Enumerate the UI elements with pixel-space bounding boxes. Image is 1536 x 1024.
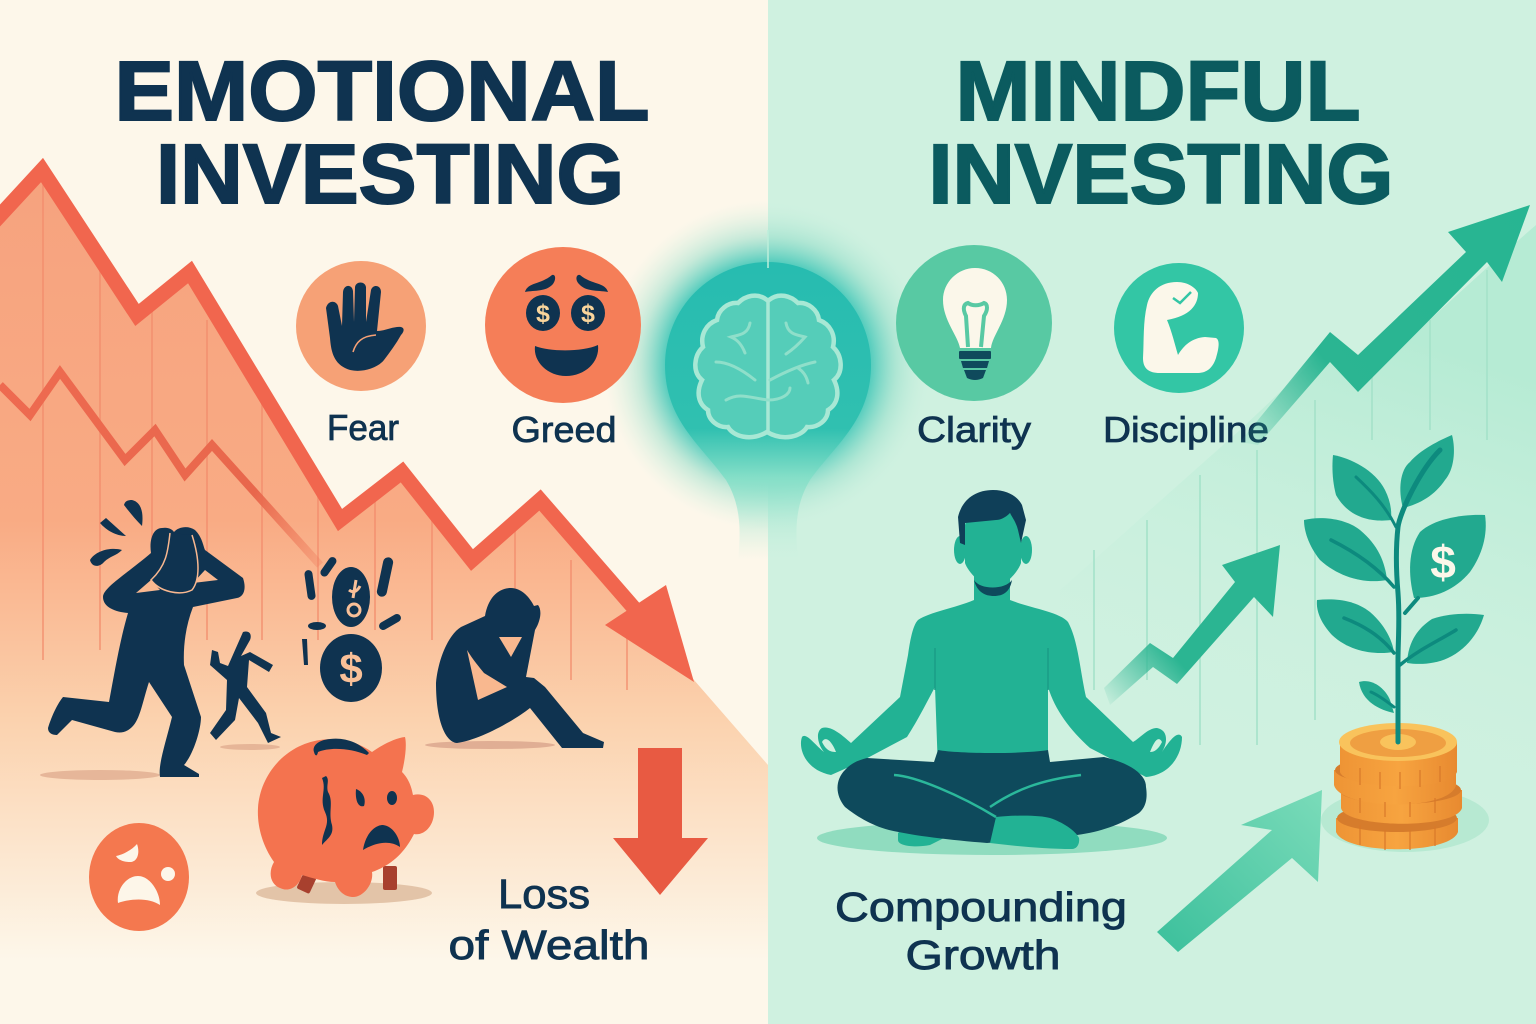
head: [954, 536, 966, 564]
title: emotional investing: EMOTIONAL: [114, 44, 650, 138]
main falling arrow: [0, 170, 694, 682]
icon: discipline flexed arm: [1114, 263, 1244, 393]
left panel: falling chart area: [0, 170, 768, 1024]
arms and torso: [801, 570, 1182, 777]
icon: fear hand: [296, 261, 426, 391]
icon: falling coins: [302, 556, 402, 702]
coin stack: [1334, 723, 1462, 850]
figure: meditating person: [801, 490, 1182, 855]
icon: greed face: [485, 247, 641, 403]
label: clarity: Clarity: [917, 409, 1031, 450]
stem and veins: [1331, 450, 1456, 742]
background: left panel: [0, 0, 768, 1024]
loss down arrow: [613, 748, 708, 895]
secondary falling line: [0, 372, 320, 565]
leg lines: [894, 775, 1081, 817]
big rising arrow: [1240, 205, 1530, 445]
icon: greed face: $: [581, 300, 595, 328]
icon: cracked piggy bank: [256, 737, 434, 904]
label: loss of wealth: of Wealth: [448, 922, 650, 968]
icon: sad face: [89, 823, 189, 931]
background: right panel: [768, 0, 1536, 1024]
label: discipline: Discipline: [1103, 409, 1269, 450]
low rising arrow: [1157, 790, 1322, 952]
icon: greed face: $: [536, 300, 550, 328]
icon: clarity light bulb: [896, 245, 1052, 401]
figure: small runner: [210, 632, 281, 750]
title: mindful investing: INVESTING: [928, 127, 1394, 221]
label: compounding growth: Growth: [906, 932, 1060, 978]
label: fear: Fear: [327, 407, 399, 448]
icon: money plant on coins: $: [1430, 536, 1456, 588]
label: compounding growth: Compounding: [835, 884, 1127, 930]
figure: panicked runner: [40, 500, 245, 780]
title: emotional investing: [114, 44, 650, 221]
legs: [838, 750, 1147, 843]
mid rising arrow: [1104, 545, 1280, 705]
title: mindful investing: MINDFUL: [956, 44, 1360, 138]
leaves: [1304, 435, 1486, 713]
arm creases: [935, 648, 1048, 690]
label: compounding growth: [835, 884, 1127, 978]
title: mindful investing: [928, 44, 1394, 221]
figure: despairing person: [425, 588, 604, 749]
label: greed: Greed: [512, 409, 616, 450]
hair: [958, 490, 1026, 545]
chin shadow: [974, 580, 1012, 596]
label: loss of wealth: [448, 871, 650, 968]
front foot: [990, 816, 1079, 849]
label: loss of wealth: Loss: [498, 871, 590, 917]
icon: brain with glow: [603, 200, 933, 560]
icon: money plant on coins: [1304, 435, 1489, 852]
right panel chart area: [1060, 225, 1536, 800]
hand holes: [822, 739, 836, 752]
title: emotional investing: INVESTING: [156, 127, 624, 221]
icon: falling coins: $: [339, 645, 363, 692]
